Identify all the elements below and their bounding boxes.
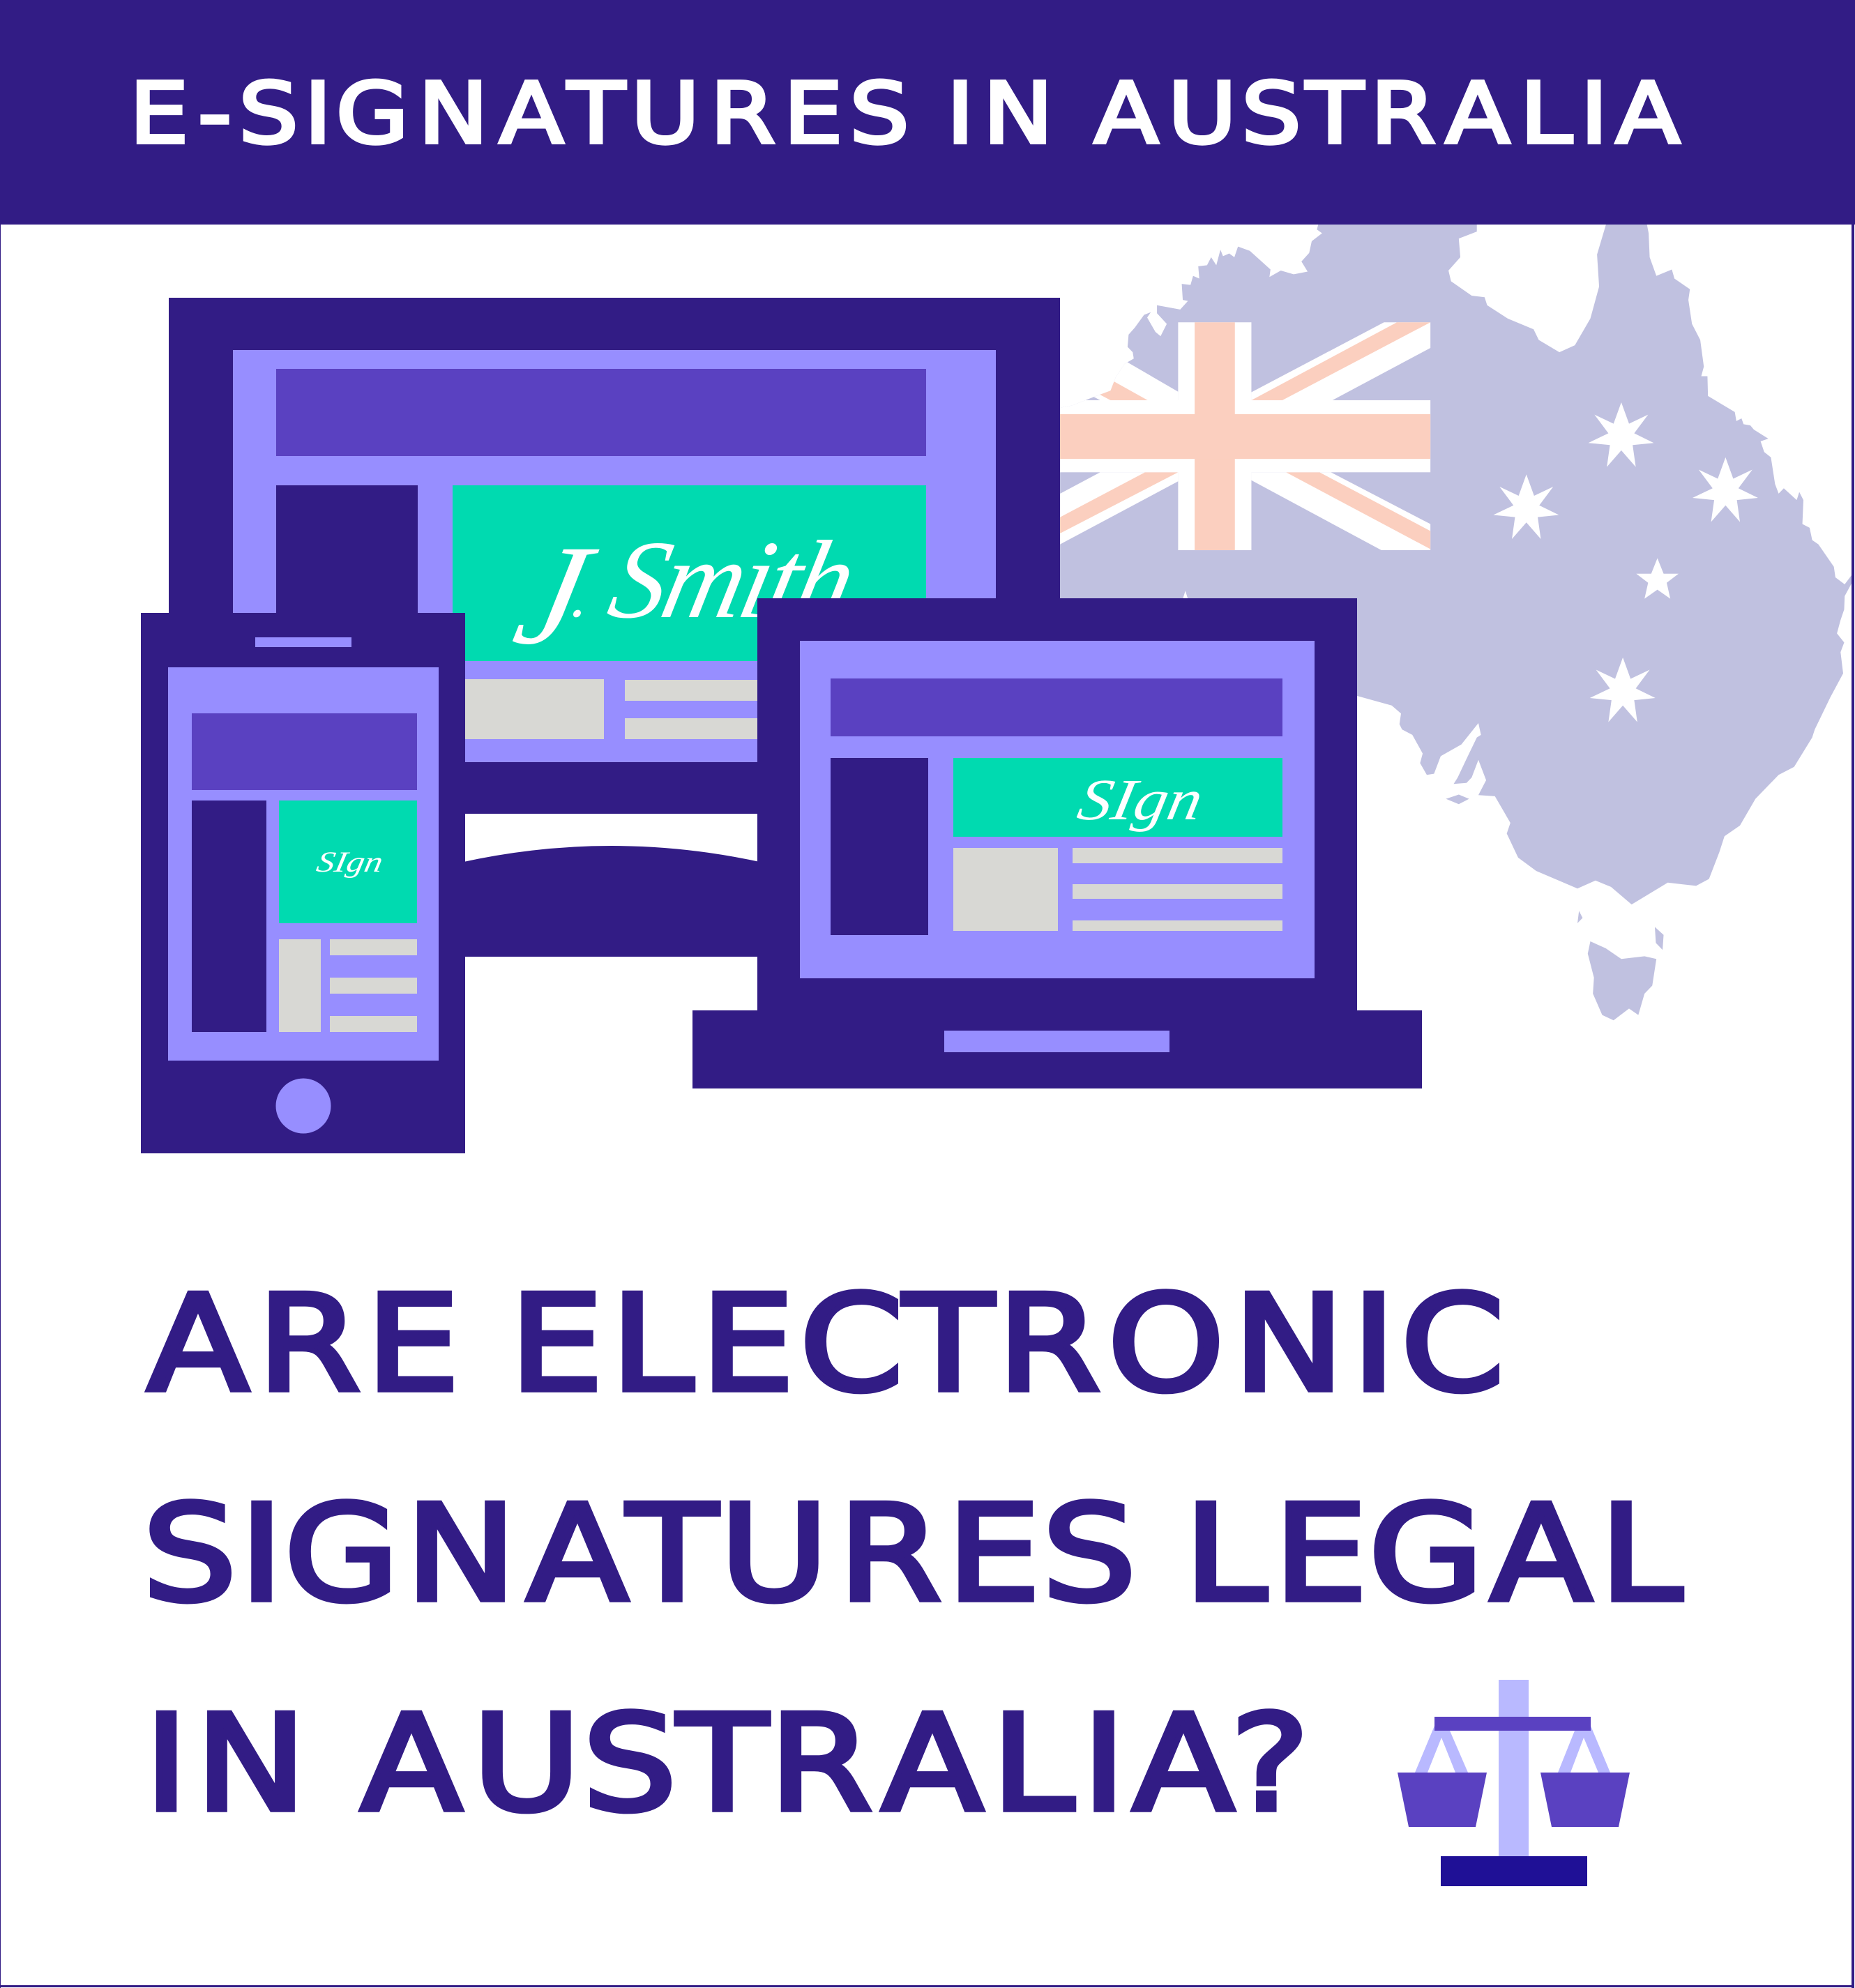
laptop: screen bbox=[800, 641, 1315, 978]
icon: left hanger bbox=[1415, 1726, 1468, 1773]
phone: grey line one bbox=[330, 939, 417, 955]
heading line one: ARE ELECTRONIC bbox=[147, 1267, 1504, 1421]
laptop: grey line two bbox=[1073, 884, 1282, 899]
icon: right pan bbox=[1540, 1773, 1630, 1827]
monitor: grey text line one bbox=[625, 680, 834, 701]
heading line three: IN AUSTRALIA? bbox=[144, 1687, 1310, 1841]
map: Southern Cross stars bbox=[1181, 402, 1758, 722]
monitor: header bar bbox=[276, 369, 926, 456]
laptop: grey line one bbox=[1073, 848, 1282, 863]
header band bbox=[0, 0, 1855, 225]
icon: base bbox=[1441, 1856, 1587, 1886]
icon: left pan bbox=[1398, 1773, 1487, 1827]
icon: beam bbox=[1434, 1717, 1591, 1731]
monitor: stand bbox=[460, 846, 763, 957]
phone: body bbox=[141, 613, 465, 1153]
laptop: sign text: SIgn bbox=[1073, 768, 1209, 833]
laptop bbox=[692, 598, 1422, 1088]
phone: grey block bbox=[279, 939, 321, 1032]
monitor: sidebar bbox=[276, 485, 418, 653]
monitor: signature panel bbox=[453, 485, 926, 661]
icon: post bbox=[1499, 1680, 1529, 1856]
icon: scales of justice bbox=[1398, 1680, 1630, 1886]
map: Australia silhouette with flag and stars bbox=[1046, 220, 1852, 1020]
laptop: trackpad bbox=[944, 1031, 1169, 1052]
monitor: grey image block bbox=[418, 679, 604, 739]
phone: sidebar bbox=[192, 800, 266, 1032]
phone: speaker bbox=[255, 637, 351, 647]
laptop: lid bbox=[757, 598, 1357, 1031]
laptop: grey block bbox=[953, 848, 1058, 931]
monitor: body bbox=[169, 298, 1060, 814]
phone: header bar bbox=[192, 713, 417, 790]
phone: screen bbox=[168, 667, 439, 1061]
icon: right hanger bbox=[1558, 1726, 1610, 1773]
map: Tasmania and southern islands bbox=[1446, 777, 1664, 1020]
laptop: signature panel bbox=[953, 758, 1282, 837]
monitor: signature text: Smith bbox=[599, 519, 863, 642]
flag: Union Jack canton bbox=[1046, 322, 1430, 552]
laptop: header bar bbox=[831, 678, 1282, 736]
heading bbox=[143, 1267, 1682, 1841]
monitor: grey text line two bbox=[625, 718, 834, 739]
phone: grey line three bbox=[330, 1016, 417, 1032]
phone: sign text: SIgn bbox=[314, 846, 386, 879]
phone: grey line two bbox=[330, 978, 417, 994]
map: northern islands bbox=[1471, 247, 1549, 326]
phone: signature panel bbox=[279, 800, 417, 923]
phone bbox=[141, 613, 465, 1153]
laptop: sidebar bbox=[831, 758, 928, 935]
heading line two: SIGNATURES LEGAL bbox=[143, 1477, 1682, 1631]
map: mainland bbox=[1046, 220, 1852, 904]
monitor: screen bbox=[233, 350, 996, 762]
monitor bbox=[169, 298, 1060, 957]
monitor: signature text: . bbox=[567, 561, 598, 630]
laptop: grey line three bbox=[1073, 920, 1282, 931]
title: E-SIGNATURES IN AUSTRALIA bbox=[129, 65, 1680, 163]
monitor: signature text: J bbox=[503, 515, 607, 674]
laptop: base bbox=[692, 1010, 1422, 1088]
phone: home button bbox=[276, 1078, 331, 1134]
